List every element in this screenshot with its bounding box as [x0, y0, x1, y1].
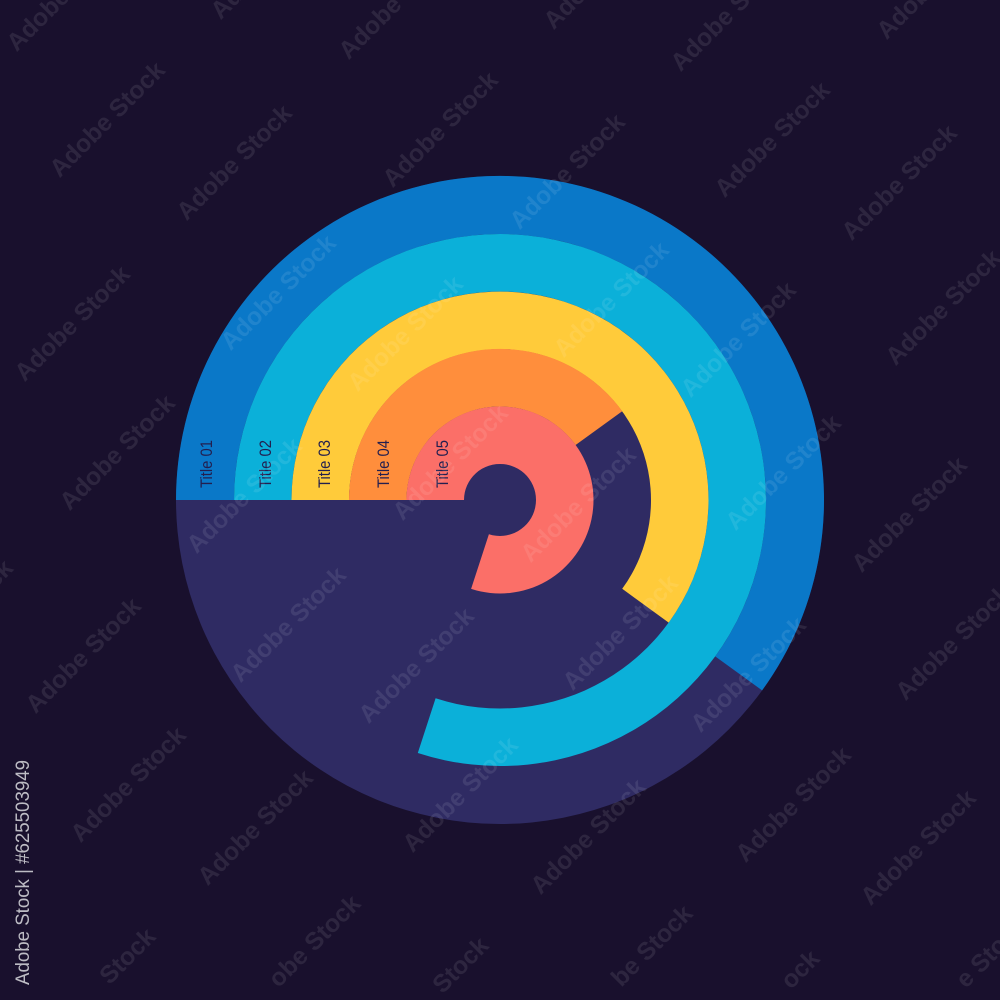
stock watermark pattern: Adobe Stock: [226, 562, 352, 688]
radial bar chart: [176, 176, 824, 824]
stock watermark pattern: Adobe Stock: [686, 612, 812, 738]
stock watermark pattern: Adobe Stock: [847, 452, 973, 578]
stock watermark pattern: Stock: [95, 923, 161, 990]
ring: Title 03: [292, 292, 708, 623]
stock watermark pattern: Adobe Stock: [526, 774, 652, 900]
stock watermark pattern: Adobe Stock: [731, 742, 857, 868]
stock watermark pattern: Adobe Stock: [558, 570, 684, 696]
ring: Title 05: [406, 406, 594, 593]
stock watermark pattern: Adobe Stock: [21, 593, 147, 719]
label: Title 05: Title 05: [434, 440, 452, 488]
stock watermark pattern: Stock: [428, 932, 494, 999]
stock watermark pattern: Adobe Stock: [55, 390, 181, 516]
stock watermark pattern: Adobe Stock: [549, 237, 675, 363]
ring: Title 02: [234, 234, 766, 766]
stock watermark pattern: Adobe Stock: [388, 400, 514, 526]
stock watermark pattern: Adobe Stock: [378, 67, 504, 193]
stock watermark pattern: Adobe Stock: [343, 271, 469, 397]
stock watermark pattern: Adobe Stock: [182, 433, 308, 559]
stock watermark pattern: Adobe Stock: [516, 442, 642, 568]
stock watermark pattern: Adobe Stock: [354, 603, 480, 729]
label: Title 01: Title 01: [198, 440, 216, 488]
label: Title 02: Title 02: [257, 440, 275, 488]
stock watermark pattern: Adobe Stock: [66, 722, 192, 848]
stock watermark pattern: ock: [776, 945, 825, 994]
stock watermark pattern: Adobe Stock: [505, 109, 631, 235]
base disc: [176, 176, 824, 824]
stock watermark pattern: Adobe Stock: [398, 732, 524, 858]
stock watermark pattern: Adobe Stock: [45, 57, 171, 183]
side credit: Adobe Stock id: Adobe Stock | #625503949: [13, 760, 34, 985]
stock watermark pattern: Adobe Stock: [710, 77, 836, 203]
ring: Title 04: [349, 349, 622, 500]
label: Title 03: Title 03: [316, 440, 334, 488]
stock watermark pattern: be Stock: [606, 900, 698, 992]
stock watermark pattern: Adobe Stock: [837, 120, 963, 246]
stock watermark pattern: obe Stock: [264, 890, 366, 993]
stock watermark pattern: Adobe Stock: [172, 100, 298, 226]
ring: Title 01: [176, 176, 824, 690]
stock watermark pattern: Adobe Stock: [721, 410, 847, 536]
stock watermark pattern: Adobe Stock: [856, 785, 982, 911]
label: Title 04: Title 04: [375, 440, 393, 488]
stock watermark pattern: Adobe Stock: [193, 765, 319, 891]
stock watermark pattern: Adobe Stock: [216, 230, 342, 356]
stock watermark pattern: Adobe Stock: [10, 261, 136, 387]
stock watermark pattern: Adobe Stock: [676, 277, 802, 403]
